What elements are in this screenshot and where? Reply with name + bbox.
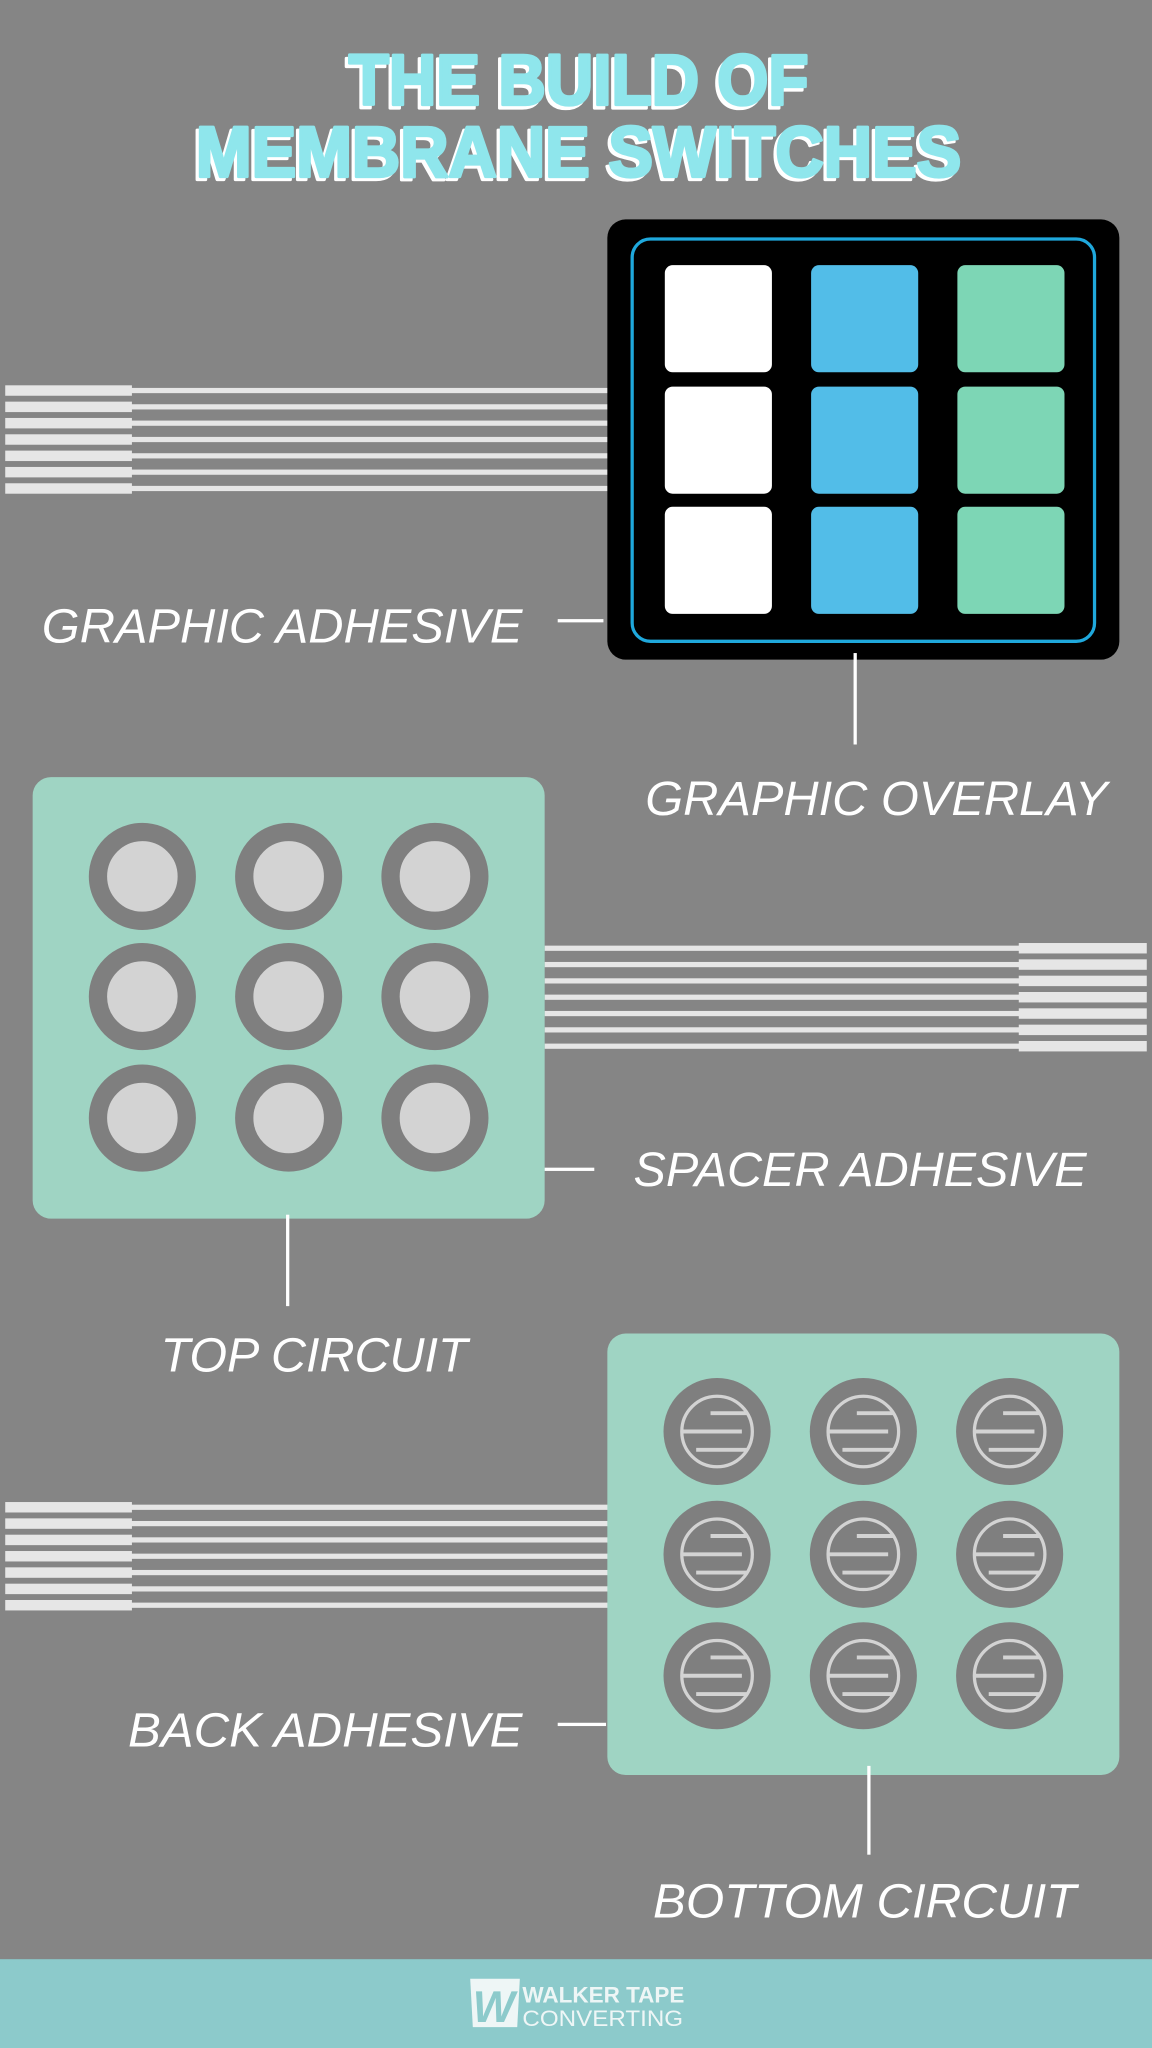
- title: [193, 40, 961, 196]
- label: top circuit: TOP CIRCUIT: [161, 1328, 471, 1382]
- footer: [0, 1959, 1152, 2048]
- label: graphic overlay: [645, 653, 1111, 826]
- panel: top circuit: [33, 777, 545, 1219]
- panel: bottom circuit: [607, 1334, 1119, 1775]
- panel: graphic overlay keypad: [607, 219, 1119, 660]
- logo text: WALKER TAPE: [522, 1982, 684, 2007]
- title: THE BUILD OF: [345, 44, 805, 124]
- title: THE BUILD OF: [349, 40, 808, 120]
- wires: graphic overlay tail: [5, 385, 609, 494]
- icon: logo W: W: [473, 1983, 519, 2032]
- label: bottom circuit: [653, 1766, 1080, 1928]
- label: graphic adhesive: GRAPHIC ADHESIVE: [42, 600, 523, 654]
- label: top circuit: [161, 1215, 471, 1382]
- title: MEMBRANE SWITCHES: [196, 112, 961, 192]
- wires: bottom circuit tail: [5, 1502, 609, 1610]
- label: graphic overlay: GRAPHIC OVERLAY: [645, 772, 1111, 826]
- label: back adhesive: BACK ADHESIVE: [128, 1703, 523, 1757]
- title: MEMBRANE SWITCHES: [193, 116, 958, 196]
- wires: top circuit tail: [545, 943, 1147, 1051]
- label: bottom circuit: BOTTOM CIRCUIT: [653, 1874, 1080, 1928]
- logo text: CONVERTING: [522, 2006, 683, 2031]
- logo text: [522, 1982, 684, 2031]
- label: spacer adhesive: SPACER ADHESIVE: [633, 1143, 1087, 1197]
